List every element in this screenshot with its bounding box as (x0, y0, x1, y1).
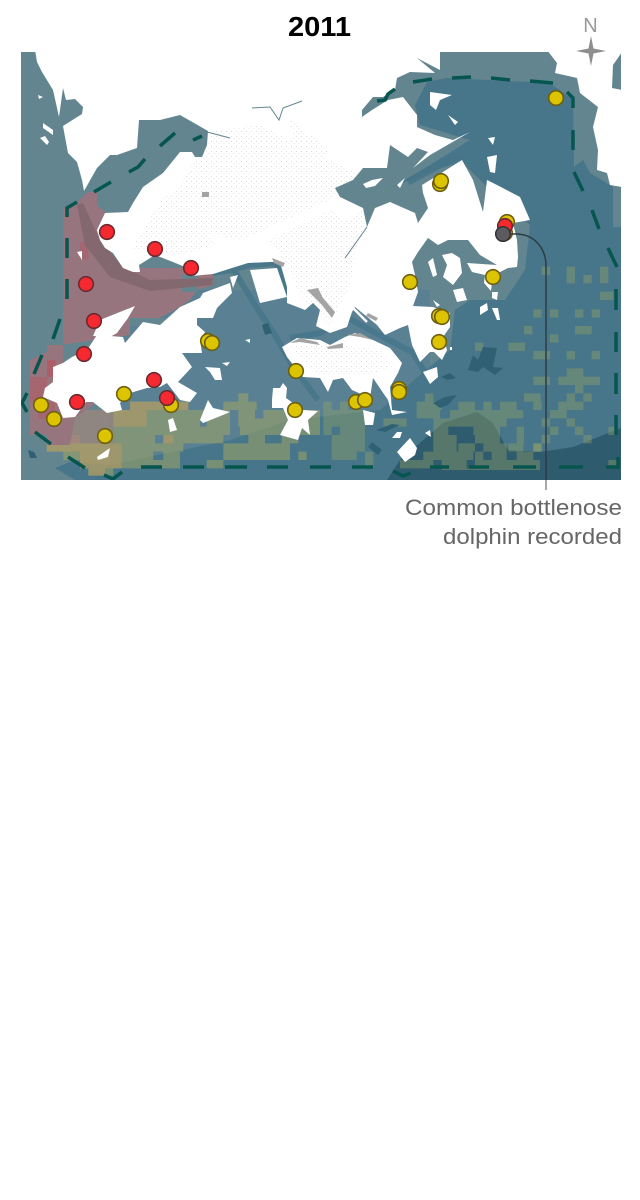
callout text: Common bottlenose (405, 495, 622, 520)
land: Chek Lap Kok airport (93, 306, 135, 337)
reefs and dark shoals (28, 323, 503, 458)
heat cells: western high density (30, 242, 88, 419)
icon: north compass: N (583, 15, 598, 37)
rivers: Shenzhen River (207, 101, 367, 258)
urban grey patches (202, 192, 378, 349)
dashed marine boundary (22, 77, 618, 479)
land: Kai Tak runway (352, 307, 367, 322)
land: smaller islands (38, 92, 500, 462)
land: Lamma Island (272, 383, 318, 440)
heat zone: western waters (30, 192, 213, 445)
land: Hong Kong Island (282, 333, 407, 415)
sea: north-east corner (612, 54, 621, 90)
map (21, 50, 622, 480)
sea: central waters (120, 290, 430, 456)
land: north-east mainland (547, 50, 622, 187)
heat cells: south Lantau waters (30, 393, 320, 476)
sea: deep south-east band (387, 412, 621, 480)
sea: shipping channels (190, 158, 462, 400)
dolphin records: yellow dots (34, 91, 563, 443)
callout text (405, 495, 622, 549)
land: New Territories and Kowloon (35, 50, 530, 362)
land: Lantau Island (43, 283, 232, 418)
urban speckle (130, 120, 395, 375)
common bottlenose dolphin marker (496, 227, 510, 241)
heat cells: eastern and southern waters (323, 267, 617, 470)
sea: outer waters (21, 52, 621, 480)
callout text: dolphin recorded (443, 524, 622, 549)
Urmston Road channel (77, 203, 213, 291)
dolphin records: red dots (70, 219, 512, 409)
land: port island (250, 268, 287, 303)
heat cell gaps in the west (130, 275, 198, 326)
callout leader below the map (545, 480, 547, 490)
callout line over the map (510, 234, 546, 480)
sea: inner darker waters (55, 78, 621, 480)
icon: north compass (576, 15, 606, 66)
title: 2011 (288, 11, 351, 42)
